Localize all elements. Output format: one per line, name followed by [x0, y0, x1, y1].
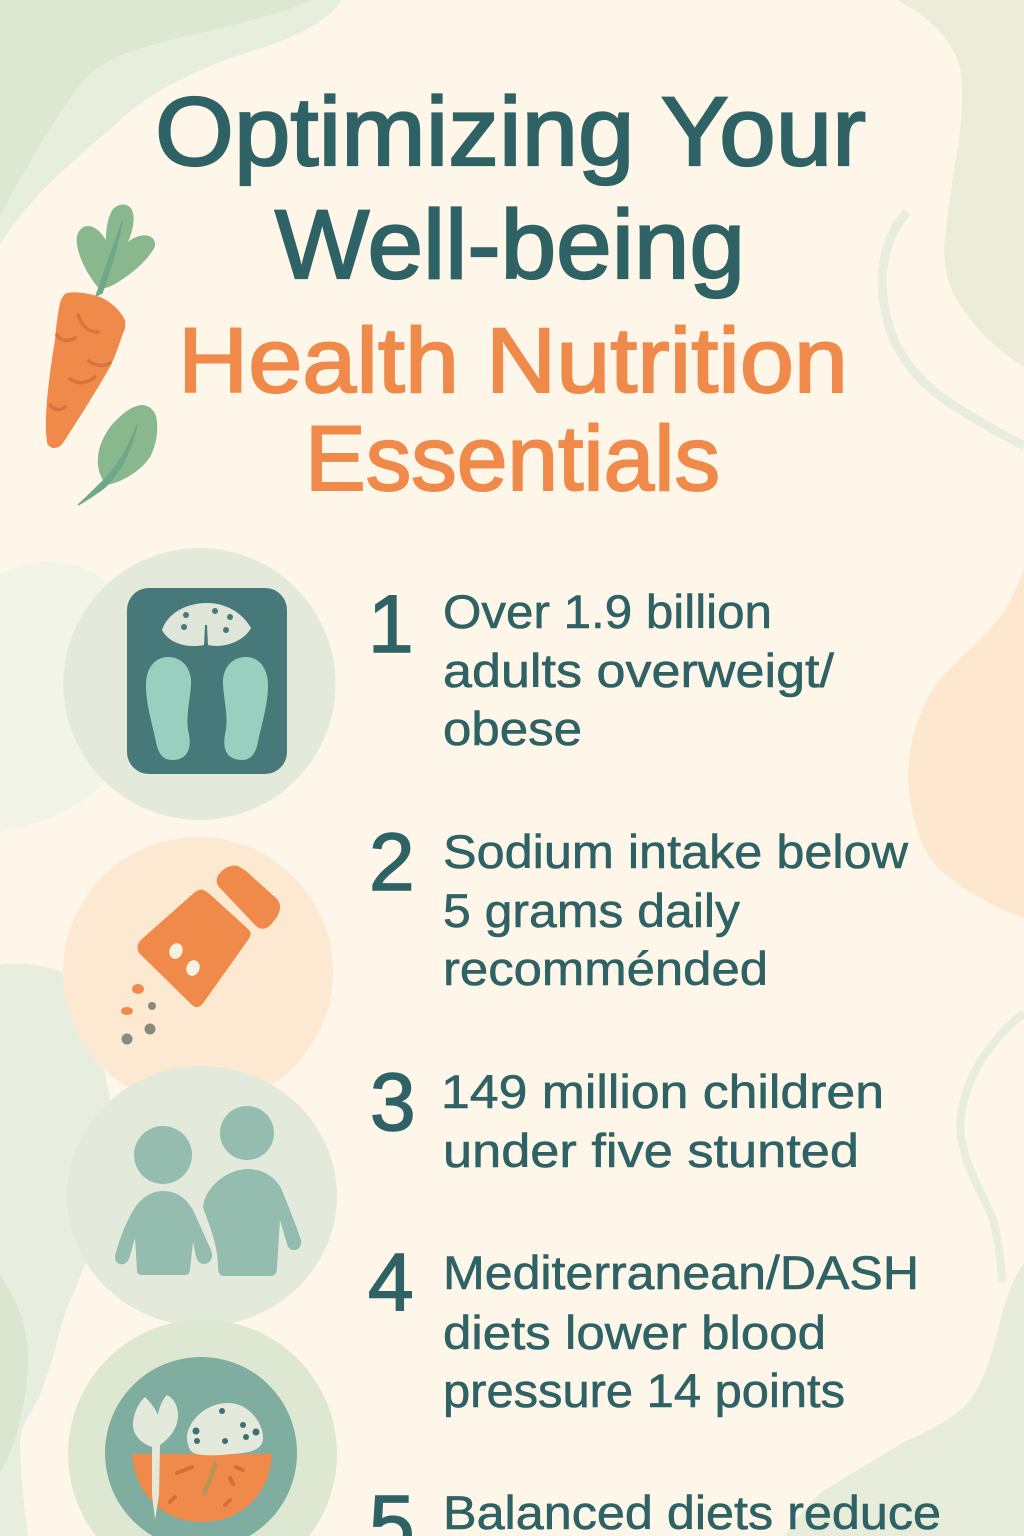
item text: diets lower blood: [443, 1306, 826, 1359]
title: Well-being: [275, 190, 745, 299]
icon: salt shaker: [63, 837, 333, 1107]
item number: 2: [369, 817, 415, 908]
panel: item 5: [369, 1479, 941, 1536]
icon: meal plate: [68, 1320, 337, 1536]
item text: under five stunted: [443, 1124, 859, 1177]
panel: item 4: [68, 1237, 919, 1536]
item text: Sodium intake below: [443, 825, 909, 878]
item text: Over 1.9 billion: [443, 585, 772, 638]
item text: Mediterranean/DASH: [443, 1246, 919, 1299]
title: Health Nutrition: [178, 310, 848, 412]
item text: 5 grams daily: [443, 884, 741, 937]
icon: bathroom scale: [64, 548, 336, 820]
item text: [443, 585, 835, 755]
title: [155, 77, 866, 510]
title: Optimizing Your: [155, 77, 866, 186]
item number: 3: [370, 1057, 416, 1148]
item text: 149 million children: [441, 1065, 884, 1118]
item text: [441, 1065, 884, 1177]
panel: item 2: [63, 817, 909, 1107]
icon: two children: [67, 1066, 337, 1326]
icon: carrot with leaves: [46, 204, 157, 505]
item text: [443, 825, 909, 995]
panel: item 3: [67, 1057, 884, 1326]
item text: pressure 14 points: [443, 1364, 845, 1417]
item text: [443, 1246, 919, 1417]
panel: item 1: [64, 548, 835, 820]
title: Essentials: [305, 408, 720, 510]
item text: obese: [443, 702, 582, 755]
item number: 4: [368, 1237, 414, 1328]
item text: adults overweigt/: [443, 644, 835, 697]
item number: 1: [368, 579, 414, 670]
item text: recomménded: [443, 942, 768, 995]
